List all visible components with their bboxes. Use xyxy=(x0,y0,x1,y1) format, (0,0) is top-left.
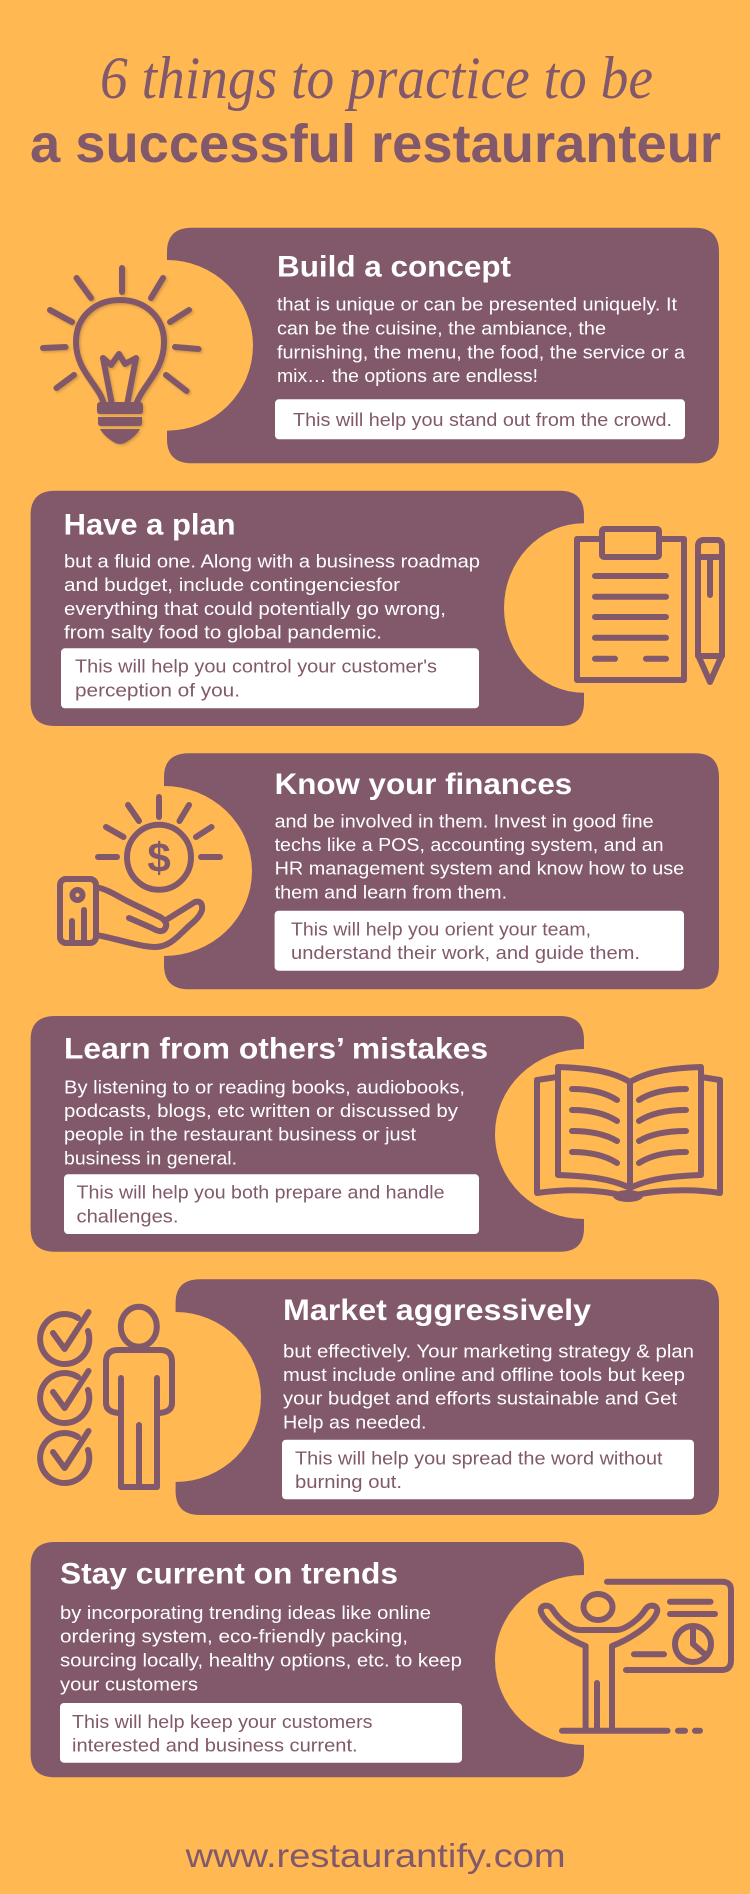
heading: Know your finances xyxy=(275,768,572,801)
callout: burning out. xyxy=(295,1471,402,1492)
callout xyxy=(60,1703,462,1763)
body text: everything that could potentially go wrong, xyxy=(64,598,446,619)
heading: Learn from others’ mistakes xyxy=(64,1032,488,1065)
title line 2: a successful restauranteur xyxy=(30,114,721,174)
title line 1: 6 things to practice to be xyxy=(100,45,653,111)
body text xyxy=(283,1340,694,1432)
icon: open book xyxy=(537,1067,720,1202)
body text: must include online and offline tools but keep xyxy=(283,1364,685,1385)
body text xyxy=(64,550,480,643)
footer website: www.restaurantify.com xyxy=(184,1837,566,1874)
panel: build a concept xyxy=(167,228,719,463)
body text: and budget, include contingenciesfor xyxy=(64,574,400,595)
body text: By listening to or reading books, audiobooks, xyxy=(64,1076,465,1097)
icon: clipboard and pencil xyxy=(577,529,722,682)
body text: techs like a POS, accounting system, and an xyxy=(275,834,664,855)
body text: from salty food to global pandemic. xyxy=(64,622,382,643)
body text: ordering system, eco-friendly packing, xyxy=(60,1626,408,1647)
heading: Market aggressively xyxy=(283,1294,591,1327)
icon: presenter with board xyxy=(541,1582,731,1731)
callout xyxy=(282,1440,694,1499)
body text: mix… the options are endless! xyxy=(277,365,538,386)
body text: by incorporating trending ideas like online xyxy=(60,1602,431,1623)
body text: podcasts, blogs, etc written or discussed by xyxy=(64,1100,459,1121)
body text: Help as needed. xyxy=(283,1411,426,1432)
icon: coin in hand: $ xyxy=(147,834,171,881)
heading: Build a concept xyxy=(277,251,511,284)
title xyxy=(30,45,721,174)
body text: business in general. xyxy=(64,1147,237,1168)
body text: your budget and efforts sustainable and Get xyxy=(283,1388,677,1409)
callout: challenges. xyxy=(76,1205,178,1226)
body text xyxy=(64,1076,465,1168)
body text: your customers xyxy=(60,1673,198,1694)
body text: sourcing locally, healthy options, etc. to keep xyxy=(60,1650,462,1671)
callout: This will help keep your customers xyxy=(72,1711,372,1732)
body text xyxy=(275,810,684,902)
panel: learn from others' mistakes xyxy=(31,1016,584,1252)
icon: coin in hand xyxy=(60,797,220,947)
heading: Have a plan xyxy=(64,508,236,541)
callout: This will help you spread the word without xyxy=(295,1447,662,1468)
body text: them and learn from them. xyxy=(275,881,507,902)
panel: know your finances xyxy=(164,753,719,989)
panel: have a plan xyxy=(31,491,584,726)
callout: interested and business current. xyxy=(72,1735,358,1756)
body text xyxy=(277,294,686,386)
body text: people in the restaurant business or just xyxy=(64,1124,416,1145)
callout: This will help you control your customer's xyxy=(75,656,437,677)
body text: that is unique or can be presented uniquely. It xyxy=(277,294,677,315)
callout: This will help you stand out from the crowd. xyxy=(293,409,672,430)
body text: and be involved in them. Invest in good fine xyxy=(275,810,654,831)
callout: understand their work, and guide them. xyxy=(291,942,640,963)
callout: This will help you both prepare and handle xyxy=(76,1182,444,1203)
heading: Stay current on trends xyxy=(60,1557,398,1590)
callout xyxy=(64,1174,479,1234)
icon: light bulb xyxy=(43,268,198,444)
callout: perception of you. xyxy=(75,680,240,701)
body text: HR management system and know how to use xyxy=(275,858,684,879)
body text xyxy=(60,1602,462,1694)
callout xyxy=(275,911,684,971)
callout xyxy=(275,399,685,439)
callout xyxy=(61,648,479,708)
panel: market aggressively xyxy=(176,1279,719,1515)
body text: furnishing, the menu, the food, the service or a xyxy=(277,341,686,362)
body text: but a fluid one. Along with a business roadmap xyxy=(64,550,480,571)
body text: but effectively. Your marketing strategy & plan xyxy=(283,1340,694,1361)
callout: This will help you orient your team, xyxy=(291,918,591,939)
body text: can be the cuisine, the ambiance, the xyxy=(277,317,606,338)
icon: person with checklist xyxy=(40,1307,172,1487)
panel: stay current on trends xyxy=(31,1542,584,1777)
